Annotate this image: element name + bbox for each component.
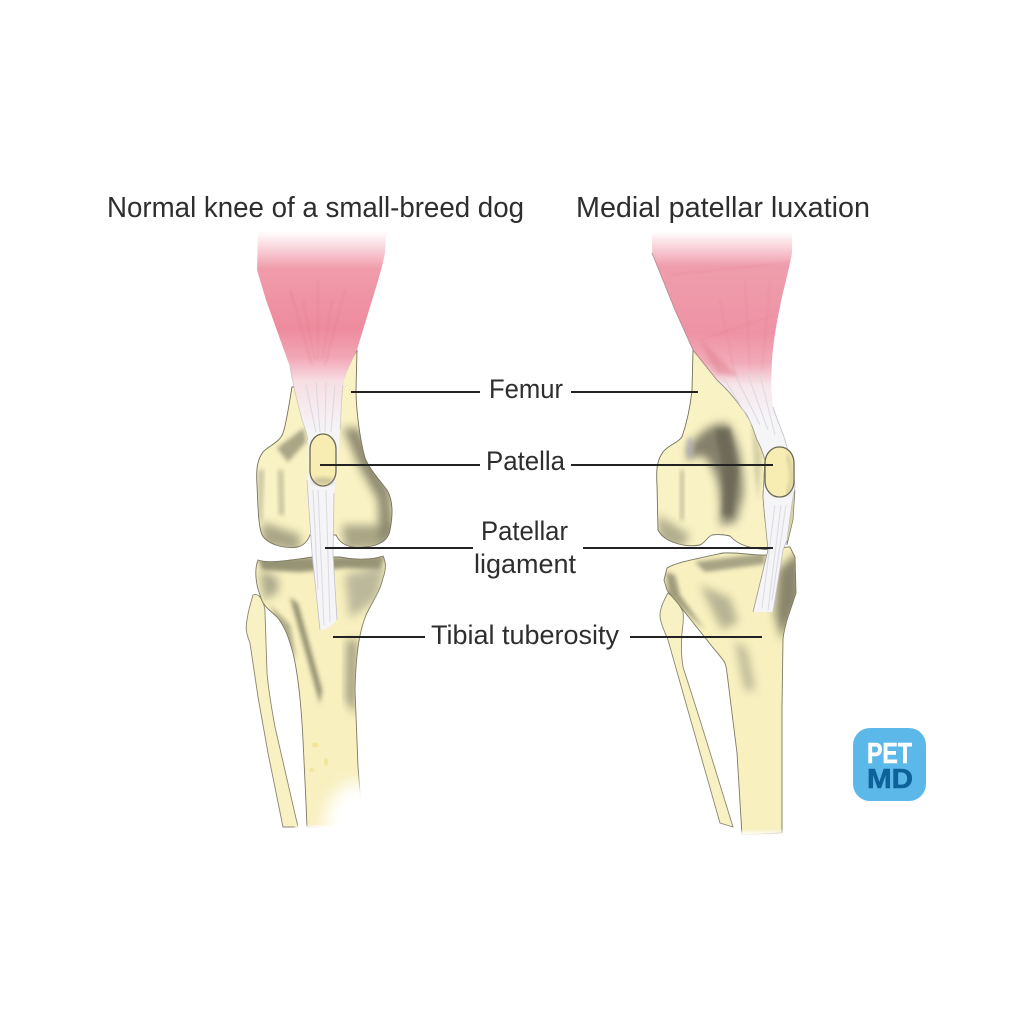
illustration: medial patellar luxation knee bbox=[652, 235, 796, 836]
logo: PetMD bbox=[853, 728, 926, 801]
label: patellar ligament: ligament bbox=[474, 549, 576, 579]
title: normal knee: Normal knee of a small-breed dog bbox=[107, 192, 524, 224]
logo: PetMD: MD bbox=[867, 763, 913, 794]
label: patellar ligament bbox=[474, 516, 576, 579]
patella bbox=[765, 447, 794, 497]
fibula bbox=[660, 593, 733, 827]
illustration: normal knee bbox=[246, 235, 392, 828]
tibia bbox=[664, 547, 800, 842]
patella bbox=[310, 434, 336, 486]
leader lines: tibial tuberosity bbox=[333, 636, 762, 638]
label: femur: Femur bbox=[489, 374, 563, 404]
femur bbox=[657, 350, 773, 550]
label: tibial tuberosity: Tibial tuberosity bbox=[431, 620, 619, 650]
quadriceps muscle and displaced tendon bbox=[640, 212, 805, 612]
quadriceps muscle and tendon bbox=[245, 212, 400, 630]
leader lines: patella bbox=[320, 464, 773, 466]
title: medial patellar luxation: Medial patellar luxation bbox=[576, 192, 870, 224]
leader lines: patellar ligament bbox=[325, 547, 773, 549]
tibia bbox=[255, 556, 386, 828]
label: patellar ligament: Patellar bbox=[481, 516, 568, 546]
fibula bbox=[246, 595, 298, 827]
femur bbox=[257, 350, 394, 552]
lateral femoral condyle sliver bbox=[787, 490, 795, 545]
label: patella: Patella bbox=[486, 446, 566, 476]
logo: PetMD: PET bbox=[867, 738, 912, 770]
muscle top fade bbox=[640, 212, 805, 234]
leader lines: femur bbox=[351, 391, 698, 393]
muscle top fade bbox=[245, 212, 400, 234]
